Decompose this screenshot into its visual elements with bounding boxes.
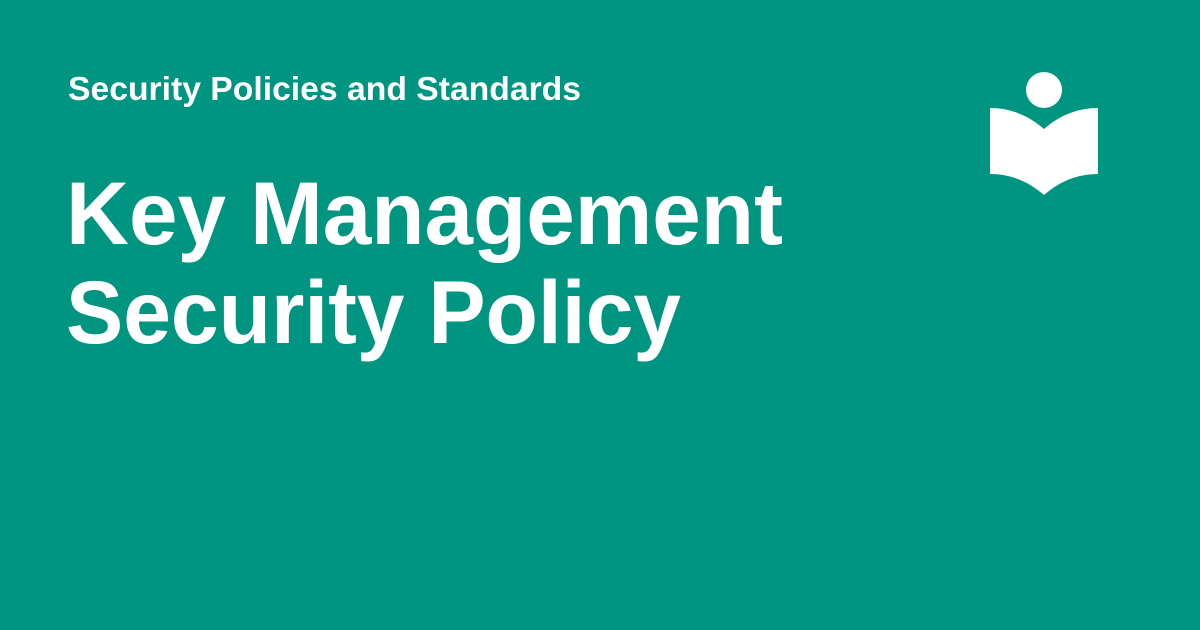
icon: open book	[990, 108, 1098, 195]
icon: person reading book	[990, 72, 1098, 195]
icon: head	[1026, 72, 1062, 108]
title	[66, 163, 783, 362]
title line 2: Security Policy	[66, 262, 681, 362]
title line 1: Key Management	[66, 163, 783, 263]
subtitle: category: Security Policies and Standards	[68, 70, 581, 107]
